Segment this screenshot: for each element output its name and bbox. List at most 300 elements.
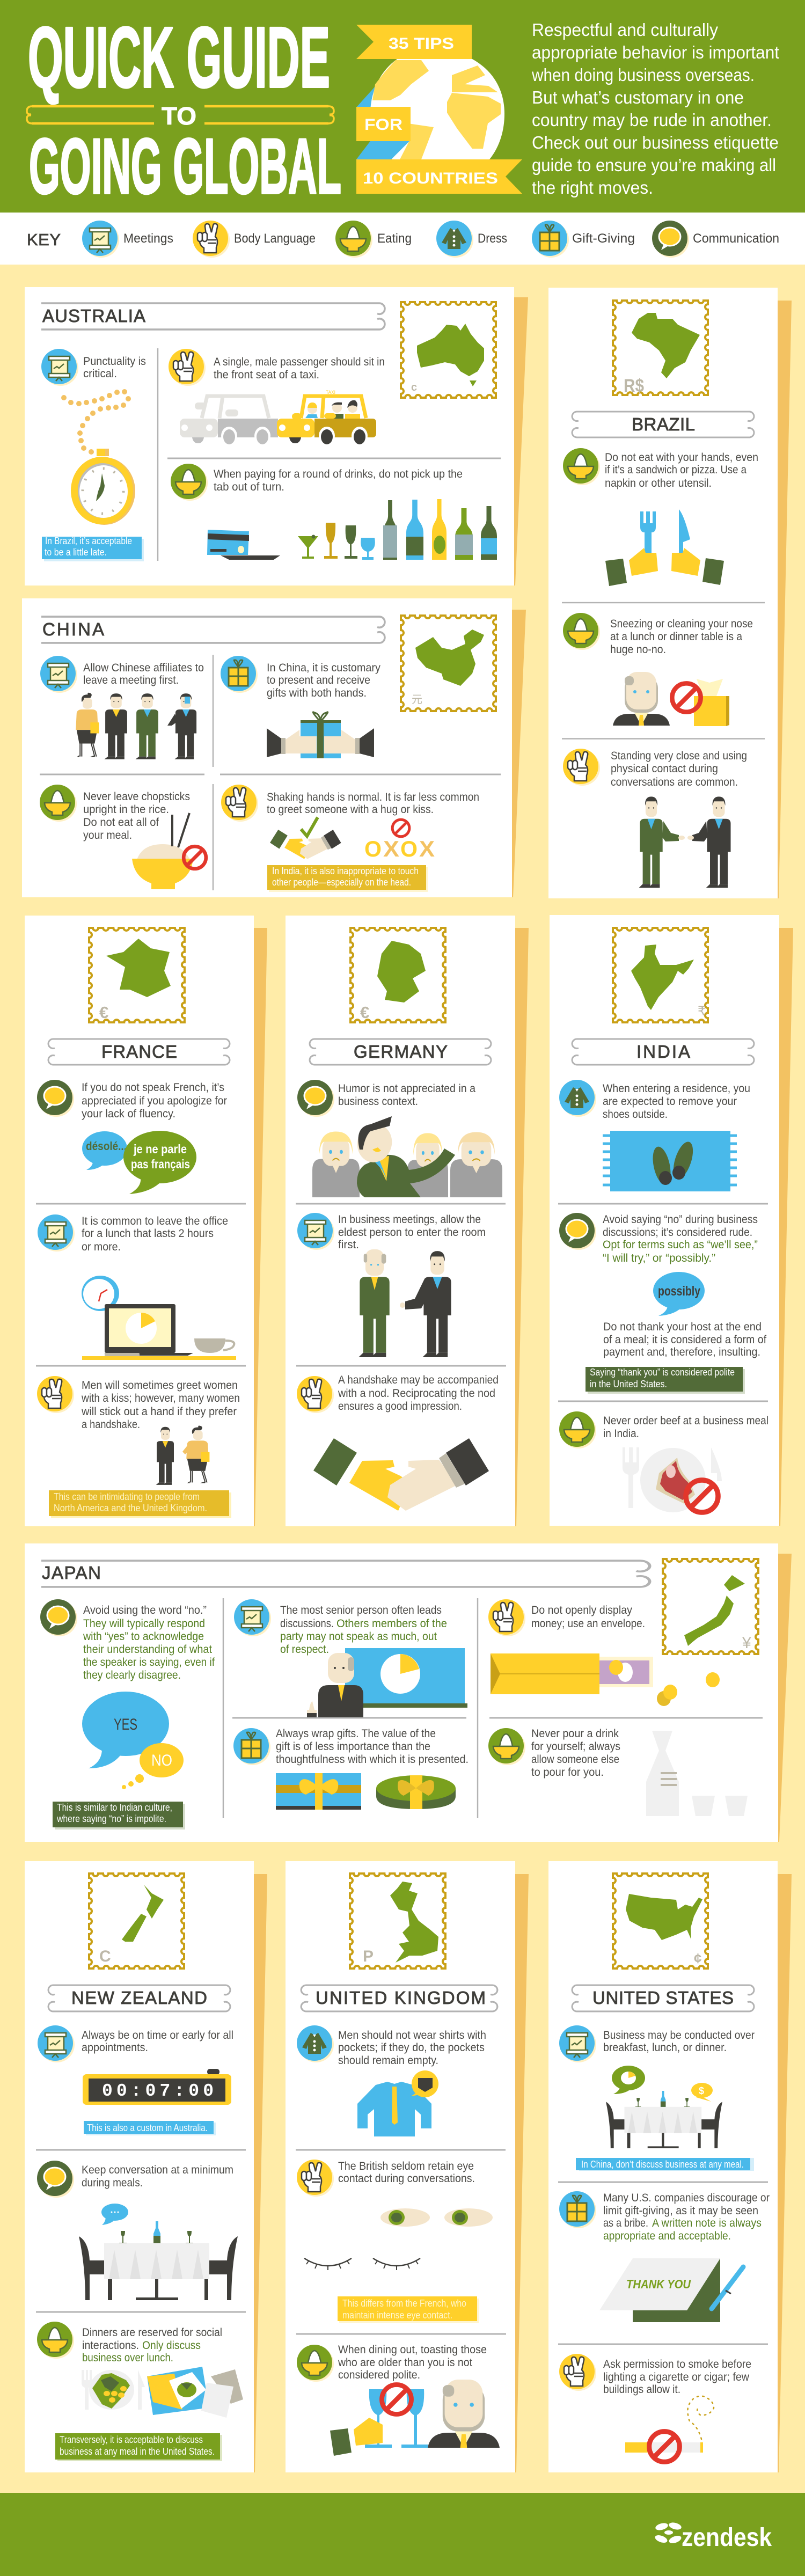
key: body language: Body Language — [234, 231, 316, 246]
stamp: usa map: ¢ — [694, 1950, 701, 1966]
stamp: france map: € — [99, 1003, 108, 1022]
tip: greeting with a kiss — [37, 1376, 240, 1518]
panel: germany — [286, 916, 529, 1526]
tip: eldest enters first: In business meetings, allow the — [338, 1213, 481, 1226]
callout: french eye contact: maintain intense eye contact. — [342, 2310, 452, 2321]
tip: standing close: physical contact during — [611, 763, 718, 775]
illustration: open and closed eyes — [304, 2208, 493, 2270]
heading: india: INDIA — [636, 1042, 690, 1062]
illustration: old man bust — [613, 672, 670, 726]
tip: never pour for yourself — [488, 1728, 748, 1816]
tip: humor: business context. — [338, 1095, 418, 1108]
heading: france — [48, 1039, 230, 1065]
callout: brazil lateness: In Brazil, it’s acceptable — [45, 536, 132, 546]
heading: india — [572, 1039, 754, 1065]
stamp: usa map — [613, 1874, 708, 1968]
tip: sneezing — [563, 613, 753, 726]
callout: north america — [49, 1490, 231, 1518]
tip: avoid the word no: with “yes” to acknowledge — [83, 1630, 204, 1643]
illustration: speech bubbles: pas français — [131, 1157, 190, 1171]
illustration: old man and younger man — [358, 1249, 451, 1357]
tip: apologize for lack of french: If you do not speak French, it’s — [82, 1081, 224, 1094]
intro text: when doing business overseas. — [531, 65, 755, 85]
tip: toasting elders: who are older than you is not — [338, 2357, 472, 2369]
heading: australia: AUSTRALIA — [42, 306, 145, 326]
tip: gift-giving limits: as a bribe. — [603, 2217, 648, 2229]
callout: india touching — [267, 865, 428, 892]
zendesk logo — [654, 2521, 772, 2552]
globe badge — [356, 25, 522, 194]
panel: china — [22, 598, 526, 897]
tip: leave meeting first: leave a meeting first. — [83, 674, 179, 686]
key: communication — [652, 221, 779, 258]
tip: shaking hands: Shaking hands is normal. It is far less common — [267, 791, 479, 803]
tip: social dinners: Only discuss — [142, 2339, 201, 2352]
tip: business over meals: breakfast, lunch, or dinner. — [603, 2041, 727, 2054]
callout: china meals: In China, don’t discuss business at any meal. — [581, 2159, 744, 2170]
tip: remove shoes — [559, 1080, 750, 1191]
illustration: salad plate — [82, 2370, 145, 2410]
intro text: appropriate behavior is important — [532, 42, 779, 62]
illustration: yes and no bubbles: YES — [114, 1716, 137, 1733]
tip: avoid the word no: their understanding of what — [83, 1643, 212, 1656]
illustration: possibly bubble: possibly — [658, 1284, 700, 1299]
illustration: credit card on tray — [207, 530, 280, 560]
text: do not thank: of a meal; it is considered a form of — [603, 1334, 766, 1346]
illustration: joking man among colleagues — [312, 1116, 502, 1197]
heading: china — [41, 617, 385, 643]
stamp: france map — [89, 928, 185, 1022]
illustration: bottles — [383, 499, 497, 560]
tip: toasting elders: considered polite. — [338, 2369, 420, 2381]
callout: transversely: business at any meal in the United States. — [60, 2446, 215, 2457]
tip: avoid saying no: Opt for terms such as “we’ll see,” — [603, 1239, 758, 1251]
illustration: presenter with pie chart — [307, 1648, 467, 1717]
illustration: yes and no bubbles: NO — [151, 1752, 172, 1769]
tip: minimal conversation — [37, 2161, 238, 2300]
tip: apologize for lack of french: appreciated if you apologize for — [82, 1095, 227, 1107]
heading: germany — [310, 1039, 491, 1065]
illustration: no kissing: O — [364, 836, 382, 861]
tip: minimal conversation: during meals. — [82, 2177, 143, 2189]
tip: round of drinks: When paying for a round of drinks, do not pick up the — [214, 468, 463, 480]
tip: avoid the word no: they clearly disagree. — [83, 1669, 181, 1681]
tip: avoid the word no — [40, 1599, 215, 1829]
illustration: possibly bubble — [653, 1272, 705, 1316]
illustration: two businessmen — [639, 796, 731, 888]
ribbon: for: FOR — [364, 116, 402, 134]
callout: transversely: Transversely, it is acceptable to discuss — [60, 2434, 203, 2445]
title: going global: GOING GLOBAL — [29, 122, 341, 210]
stamp: japan map — [663, 1559, 758, 1654]
heading: united kingdom — [301, 1985, 497, 2011]
callout: thank you in us: in the United States. — [590, 1379, 667, 1389]
tip: no shirt pockets: should remain empty. — [338, 2054, 438, 2067]
tip: taxi seat: the front seat of a taxi. — [214, 369, 319, 381]
tip: round of drinks: tab out of turn. — [214, 481, 284, 493]
tip: long lunch: for a lunch that lasts 2 hours — [82, 1227, 214, 1240]
tip: be on time: appointments. — [82, 2041, 148, 2054]
key: gift-giving — [532, 221, 635, 258]
illustration: glasses — [298, 523, 375, 560]
tip: use an envelope: Do not openly display — [531, 1604, 632, 1616]
title ornament: to — [27, 102, 334, 130]
tip: handshake and nod: with a nod. Reciprocating the nod — [338, 1387, 495, 1400]
tip: senior person leads: of respect. — [280, 1643, 329, 1656]
key: dress — [436, 221, 507, 258]
heading: united states: UNITED STATES — [592, 1988, 734, 2008]
tip: avoid the word no: They will typically respond — [83, 1618, 205, 1630]
heading: australia — [41, 303, 385, 330]
stamp: brazil map — [613, 301, 708, 396]
illustration: taxi: TAXI — [326, 390, 335, 395]
stamp: india map: ₹ — [698, 1004, 706, 1019]
stamp: australia map: c — [411, 382, 417, 393]
heading: japan: JAPAN — [42, 1563, 101, 1583]
tip: ask before smoking — [559, 2354, 751, 2462]
heading: china: CHINA — [42, 619, 104, 639]
stamp: india map — [613, 928, 708, 1022]
heading: brazil — [572, 412, 754, 437]
tip: no beef: in India. — [603, 1428, 639, 1440]
illustration: four colleagues — [76, 693, 196, 759]
illustration: taxi — [277, 390, 376, 445]
tip: eldest enters first — [297, 1213, 486, 1357]
tip: remove shoes: shoes outside. — [603, 1108, 668, 1121]
tip: gift-giving limits — [559, 2191, 770, 2322]
callout: similar to india: where saying “no” is impolite. — [56, 1813, 166, 1824]
tip: social dinners: interactions. — [82, 2339, 139, 2352]
tip: gifts with both hands: to present and receive — [267, 674, 370, 686]
tip: handshake and nod: ensures a good impression. — [338, 1400, 462, 1413]
tip: chopsticks: Never leave chopsticks — [83, 791, 190, 803]
tip: no shirt pockets: Men should not wear shirts with — [338, 2029, 486, 2041]
callout: custom in australia — [84, 2121, 216, 2135]
illustration: no kissing: X — [419, 836, 435, 861]
callout: similar to india — [53, 1802, 185, 1829]
illustration: digital timer — [83, 2069, 231, 2105]
tip: leave meeting first — [40, 656, 204, 759]
illustration: large handshake — [313, 1438, 489, 1511]
tip: minimal conversation: Keep conversation at a minimum — [82, 2164, 233, 2176]
illustration: shirt with pocket bubble — [357, 2070, 438, 2136]
intro text: Check out our business etiquette — [532, 133, 779, 152]
tip: handshake and nod — [297, 1374, 499, 1511]
tip: no beef: Never order beef at a business meal — [603, 1415, 769, 1427]
illustration: speech bubbles: je ne parle — [133, 1142, 187, 1156]
tip: be on time: Always be on time or early for all — [82, 2029, 233, 2041]
tip: gift-giving limits: A written note is always — [652, 2217, 762, 2229]
illustration: speech bubbles — [82, 1131, 196, 1194]
tip: wrap gifts — [233, 1728, 469, 1810]
text: do not thank: payment and, therefore, insulting. — [603, 1346, 760, 1358]
callout: india touching: other people—especially on the head. — [272, 877, 411, 888]
tip: toasting elders — [297, 2344, 500, 2456]
heading: brazil: BRAZIL — [632, 414, 695, 434]
stamp: china map — [401, 616, 496, 711]
callout: north america: This can be intimidating to people from — [54, 1491, 200, 1502]
zendesk logo: zendesk — [682, 2523, 772, 2552]
tip: punctuality — [41, 349, 146, 561]
illustration: clock, laptop and coffee — [82, 1276, 236, 1360]
tip: chopsticks: Do not eat all of — [83, 816, 159, 829]
illustration: sake bottle and cups — [646, 1731, 748, 1816]
tip: no eating with hands: napkin or other utensil. — [605, 477, 712, 489]
tip: taxi seat — [169, 349, 385, 445]
text: do not thank: Do not thank your host at the end — [603, 1321, 762, 1333]
tip: gift-giving limits: appropriate and acceptable. — [603, 2230, 731, 2242]
illustration: wrapped gifts — [276, 1773, 456, 1810]
tip: apologize for lack of french — [37, 1080, 227, 1194]
key: eating: Eating — [377, 231, 412, 246]
intro text: Respectful and culturally — [532, 20, 718, 40]
illustration: handshake with checkmark — [270, 817, 341, 859]
illustration: speech bubbles: désolé... — [86, 1139, 127, 1153]
tip: greeting with a kiss: with a kiss; however, many women — [81, 1392, 240, 1404]
heading: new zealand: NEW ZEALAND — [71, 1988, 207, 2008]
ribbon: 35 tips — [356, 25, 472, 59]
heading: united states — [572, 1985, 754, 2011]
stamp: new zealand map: C — [99, 1948, 111, 1965]
tip: punctuality: critical. — [83, 368, 117, 380]
tip: no eating with hands — [563, 448, 758, 586]
illustration: cigarette with smoke — [625, 2396, 714, 2462]
tip: chopsticks: upright in the rice. — [83, 803, 169, 816]
callout: thank you in us — [586, 1367, 745, 1394]
callout: brazil lateness — [42, 536, 144, 561]
tip: standing close — [563, 749, 747, 888]
illustration: pocket watch — [61, 389, 135, 525]
stamp: china map: 元 — [412, 694, 422, 706]
tip: wrap gifts: gift is of less importance than the — [276, 1740, 430, 1753]
tip: avoid the word no: Avoid using the word “no.” — [83, 1604, 207, 1616]
callout: similar to india: This is similar to Indian culture, — [57, 1802, 172, 1813]
tip: use an envelope — [488, 1599, 720, 1706]
illustration: rice bowl with chopsticks — [132, 813, 206, 889]
callout: brazil lateness: to be a little late. — [45, 547, 107, 558]
panel: united kingdom — [286, 1861, 529, 2472]
tip: no eating with hands: Do not eat with your hands, even — [605, 451, 758, 464]
illustration: envelope with cash and coins — [491, 1653, 720, 1706]
ribbon: 10 countries — [356, 159, 522, 194]
tip: gift-giving limits: limit gift-giving, as it may be seen — [603, 2205, 758, 2217]
stamp: new zealand map — [89, 1874, 184, 1968]
tip: eye contact: contact during conversations. — [338, 2172, 475, 2185]
illustration: toast with old man — [330, 2380, 500, 2456]
intro text: the right moves. — [532, 178, 653, 197]
illustration: business documents — [147, 2367, 243, 2418]
illustration: hands with utensils — [605, 509, 724, 586]
illustration: tissue box — [672, 679, 729, 726]
illustration: dining table — [79, 2204, 238, 2300]
tip: senior person leads — [234, 1599, 467, 1717]
key: gift-giving: Gift-Giving — [572, 231, 635, 246]
stamp: australia map — [401, 302, 496, 398]
panel: japan — [25, 1543, 792, 1842]
tip: business over meals: Business may be conducted over — [603, 2029, 755, 2041]
tip: never pour for yourself: allow someone else — [531, 1753, 619, 1766]
key legend: KEY — [27, 230, 61, 249]
tip: remove shoes: are expected to remove your — [603, 1095, 737, 1108]
tip: wrap gifts: thoughtfulness with which it is presented. — [276, 1753, 469, 1766]
tip: social dinners: business over lunch. — [82, 2352, 173, 2364]
header banner — [0, 0, 805, 213]
heading: japan — [41, 1561, 649, 1587]
intro text: But what’s customary in one — [532, 87, 744, 107]
tip: gifts with both hands — [221, 656, 380, 758]
tip: avoid the word no: the speaker is saying, even if — [83, 1656, 215, 1668]
callout: custom in australia: This is also a custom in Australia. — [87, 2123, 208, 2133]
tip: toasting elders: When dining out, toasting those — [338, 2344, 487, 2356]
panel: australia — [25, 287, 528, 586]
illustration: digital timer: 00:07:00 — [102, 2081, 214, 2101]
illustration: business dinner table — [606, 2066, 722, 2148]
callout: french eye contact — [338, 2296, 479, 2323]
callout: north america: North America and the United Kingdom. — [54, 1503, 207, 1513]
callout: transversely — [55, 2433, 222, 2461]
illustration: thank you card and pen: THANK YOU — [626, 2277, 691, 2291]
tip: social dinners — [37, 2322, 243, 2461]
callout: india touching: In India, it is also inappropriate to touch — [272, 866, 419, 876]
tip: long lunch: or more. — [82, 1241, 121, 1253]
tip: gifts with both hands: In China, it is customary — [267, 662, 380, 674]
panel: new zealand — [25, 1861, 267, 2472]
tip: sneezing: Sneezing or cleaning your nose — [610, 618, 753, 630]
tip: sneezing: at a lunch or dinner table is a — [610, 631, 742, 643]
tip: standing close: Standing very close and using — [611, 750, 747, 762]
tip: handshake and nod: A handshake may be accompanied — [338, 1374, 499, 1386]
tip: avoid saying no: discussions; it’s considered rude. — [603, 1226, 752, 1239]
key: eating — [335, 221, 412, 258]
key: body language — [193, 221, 316, 258]
tip: senior person leads: discussions. — [280, 1618, 334, 1630]
panel: united states — [548, 1861, 792, 2472]
intro text: guide to ensure you’re making all — [532, 155, 776, 175]
callout: french eye contact: This differs from the French, who — [342, 2298, 466, 2309]
tip: greeting with a kiss: will stick out a hand if they prefer — [81, 1406, 237, 1418]
tip: no beef — [559, 1411, 769, 1512]
tip: long lunch — [38, 1214, 236, 1360]
illustration: thank you card and pen — [599, 2258, 743, 2322]
tip: greeting with a kiss: Men will sometimes greet women — [82, 1379, 238, 1392]
tip: wrap gifts: Always wrap gifts. The value of the — [276, 1728, 436, 1740]
tip: avoid saying no: Avoid saying “no” during business — [603, 1213, 758, 1226]
panel: france — [25, 916, 267, 1526]
illustration: beef on plate — [623, 1447, 722, 1512]
text: do not thank — [603, 1321, 766, 1358]
tip: social dinners: Dinners are reserved for social — [82, 2326, 222, 2339]
tip: use an envelope: money; use an envelope. — [531, 1618, 645, 1630]
key: meetings: Meetings — [123, 231, 173, 246]
tip: ask before smoking: buildings allow it. — [603, 2383, 680, 2396]
tip: avoid saying no: “I will try,” or “possibly.” — [603, 1252, 715, 1264]
illustration: business dinner table: $ — [699, 2085, 704, 2096]
heading: united kingdom: UNITED KINGDOM — [316, 1988, 486, 2008]
tip: chopsticks: your meal. — [83, 829, 132, 841]
tip: gift-giving limits: Many U.S. companies discourage or — [603, 2192, 770, 2204]
tip: remove shoes: When entering a residence, you — [603, 1082, 750, 1095]
tip: avoid saying no — [559, 1213, 766, 1394]
callout: thank you in us: Saying “thank you” is considered polite — [590, 1367, 735, 1378]
stamp: uk map — [350, 1874, 445, 1968]
illustration: grey car — [180, 396, 278, 445]
illustration: no kissing: O — [400, 836, 418, 861]
footer banner — [0, 2493, 805, 2576]
tip: shaking hands — [221, 785, 479, 892]
stamp: brazil map: R$ — [624, 376, 644, 396]
tip: long lunch: It is common to leave the office — [82, 1215, 228, 1227]
tip: senior person leads: party may not speak as much, out — [280, 1630, 437, 1643]
ribbon: 10 countries: 10 COUNTRIES — [363, 170, 498, 187]
tip: shaking hands: to greet someone with a hug or kiss. — [267, 803, 434, 816]
tip: humor: Humor is not appreciated in a — [338, 1082, 475, 1095]
panel: india — [550, 915, 793, 1526]
tip: sneezing: huge no-no. — [610, 643, 666, 656]
intro text — [531, 20, 779, 197]
tip: ask before smoking: lighting a cigarette or cigar; few — [603, 2371, 750, 2383]
tip: senior person leads: Others members of the — [336, 1618, 447, 1630]
stamp: japan map: ¥ — [742, 1634, 751, 1652]
tip: no shirt pockets: pockets; if they do, the pockets — [338, 2041, 485, 2054]
illustration: no kissing: X — [383, 836, 399, 861]
heading: germany: GERMANY — [354, 1042, 448, 1062]
illustration: no kissing — [364, 819, 435, 861]
intro text: country may be rude in another. — [532, 110, 772, 130]
ribbon: for — [356, 107, 411, 141]
tip: never pour for yourself: to pour for you. — [531, 1766, 604, 1779]
tip: no shirt pockets — [297, 2025, 486, 2136]
tip: taxi seat: A single, male passenger should sit in — [214, 356, 385, 368]
tip: senior person leads: The most senior person often leads — [280, 1604, 442, 1616]
tip: be on time — [38, 2025, 233, 2135]
illustration: man and woman — [156, 1426, 209, 1485]
tip: eye contact: The British seldom retain eye — [338, 2160, 474, 2172]
tip: greeting with a kiss: a handshake. — [82, 1418, 140, 1431]
ribbon: 35 tips: 35 TIPS — [389, 35, 454, 53]
tip: eldest enters first: eldest person to enter the room — [338, 1226, 486, 1239]
key: meetings — [82, 221, 173, 258]
panel: brazil — [548, 288, 792, 898]
key: communication: Communication — [693, 231, 779, 246]
tip: never pour for yourself: for yourself; always — [531, 1740, 620, 1753]
tip: no eating with hands: if it’s a sandwich or pizza. Use a — [605, 464, 747, 476]
tip: business over meals — [559, 2025, 755, 2171]
tip: apologize for lack of french: your lack of fluency. — [82, 1108, 175, 1120]
title: quick guide: QUICK GUIDE — [28, 9, 330, 105]
tip: eldest enters first: first. — [338, 1239, 359, 1251]
tip: chopsticks — [40, 785, 206, 889]
tip: eye contact — [297, 2160, 493, 2323]
tip: round of drinks — [171, 464, 497, 560]
tip: never pour for yourself: Never pour a drink — [531, 1728, 619, 1740]
key: dress: Dress — [478, 231, 507, 246]
heading: new zealand — [48, 1985, 230, 2011]
stamp: uk map: P — [363, 1948, 374, 1965]
illustration: gift in hands — [267, 712, 374, 758]
tip: standing close: conversations are common. — [611, 776, 738, 788]
tip: ask before smoking: Ask permission to smoke before — [603, 2358, 751, 2370]
title ornament: to: TO — [162, 102, 196, 130]
tip: punctuality: Punctuality is — [83, 355, 146, 368]
stamp: germany map: € — [360, 1003, 369, 1022]
illustration: rug with shoes — [603, 1131, 737, 1191]
tip: leave meeting first: Allow Chinese affiliates to — [83, 662, 204, 674]
tip: humor — [297, 1080, 502, 1197]
tip: gifts with both hands: gifts with both hands. — [267, 687, 367, 699]
stamp: germany map — [350, 928, 445, 1022]
heading: france: FRANCE — [101, 1042, 177, 1062]
illustration: yes and no bubbles — [82, 1692, 184, 1789]
